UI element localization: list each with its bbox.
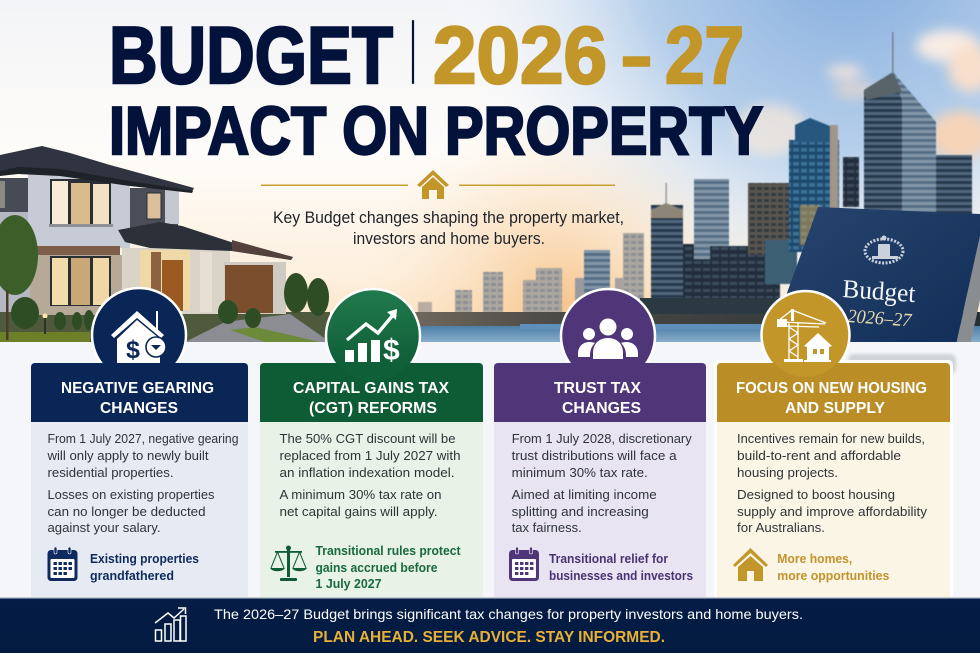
callout: 1 July 2027	[316, 577, 382, 591]
callout	[549, 552, 693, 583]
footer banner	[0, 597, 980, 653]
heading: TRUST TAX	[554, 380, 641, 397]
heading	[61, 380, 214, 417]
house	[0, 146, 330, 345]
heading: CAPITAL GAINS TAX	[293, 380, 449, 397]
body text: net capital gains will apply.	[280, 504, 438, 519]
panel: negative gearing	[31, 288, 248, 597]
body text: can no longer be deducted	[48, 504, 206, 519]
heading: FOCUS ON NEW HOUSING	[736, 380, 927, 397]
callout	[316, 544, 461, 591]
callout: businesses and investors	[549, 569, 693, 583]
body text: splitting and increasing	[512, 504, 649, 519]
body text: trust distributions will face a	[512, 448, 677, 463]
heading: NEGATIVE GEARING	[61, 380, 214, 397]
title: 27	[665, 11, 744, 101]
callout: grandfathered	[90, 569, 174, 583]
icon: scales	[270, 546, 307, 581]
body text: minimum 30% tax rate.	[512, 465, 648, 480]
body text	[512, 431, 692, 535]
title: BUDGET	[109, 11, 393, 101]
panel: new housing and supply	[714, 291, 956, 600]
body text: replaced from 1 July 2027 with	[280, 448, 460, 463]
heading: CHANGES	[562, 400, 641, 417]
footer message: The 2026–27 Budget brings significant tax changes for property investors and home buyers.	[214, 606, 803, 622]
divider with house icon	[261, 170, 615, 199]
icon: house	[733, 548, 768, 581]
body text: Designed to boost housing	[737, 487, 895, 502]
icon: calendar	[48, 547, 78, 581]
subtitle: investors and home buyers.	[353, 230, 545, 248]
callout: Existing properties	[90, 552, 199, 566]
body text: Losses on existing properties	[48, 487, 215, 502]
callout: More homes,	[777, 552, 852, 566]
body text: From 1 July 2028, discretionary	[512, 431, 692, 446]
callout	[777, 552, 889, 583]
title	[109, 11, 763, 169]
callout	[90, 552, 199, 583]
book title: Budget	[842, 274, 917, 308]
icon: growth chart with dollar: $	[383, 334, 400, 367]
subtitle: Key Budget changes shaping the property market,	[273, 209, 624, 227]
icon: crane and house	[717, 291, 950, 422]
heading	[554, 380, 641, 417]
body text: housing projects.	[737, 465, 838, 480]
icon: growth chart with dollar	[260, 289, 483, 422]
body text: supply and improve affordability	[737, 504, 928, 519]
heading	[736, 380, 927, 417]
body text: A minimum 30% tax rate on	[280, 487, 442, 502]
panel: trust tax	[494, 289, 706, 597]
shore and water	[415, 298, 980, 343]
icon: growth chart	[155, 608, 186, 641]
skyline	[418, 32, 972, 316]
icon: group of people	[494, 289, 706, 422]
subtitle	[273, 209, 624, 248]
heading: (CGT) REFORMS	[309, 400, 437, 417]
title: –	[622, 11, 651, 101]
body text: Aimed at limiting income	[512, 487, 657, 502]
icon: house with dollar: $	[126, 336, 140, 364]
body text: build-to-rent and affordable	[737, 448, 901, 463]
body text: will only apply to newly built	[46, 448, 209, 463]
title: 2026	[433, 11, 607, 101]
body text: From 1 July 2027, negative gearing	[48, 431, 238, 446]
callout: more opportunities	[777, 569, 889, 583]
callout: gains accrued before	[316, 561, 438, 575]
body text	[280, 431, 460, 519]
book year: 2026–27	[847, 306, 913, 332]
callout: Transitional relief for	[549, 552, 668, 566]
body text: Incentives remain for new builds,	[737, 431, 925, 446]
footer call to action: PLAN AHEAD. SEEK ADVICE. STAY INFORMED.	[313, 629, 665, 646]
budget book	[760, 207, 980, 400]
callout: Transitional rules protect	[316, 544, 461, 558]
body text: tax fairness.	[512, 520, 582, 535]
body text: residential properties.	[48, 465, 174, 480]
body text: an inflation indexation model.	[280, 465, 454, 480]
heading: AND SUPPLY	[785, 400, 885, 417]
body text: The 50% CGT discount will be	[280, 431, 456, 446]
heading: CHANGES	[100, 400, 178, 417]
icon: house with dollar	[31, 288, 248, 422]
icon: calendar	[509, 547, 539, 581]
body text	[46, 431, 239, 535]
coat of arms emblem	[865, 236, 903, 263]
body text: against your salary.	[48, 520, 160, 535]
title: IMPACT ON PROPERTY	[109, 93, 763, 169]
body text: for Australians.	[737, 520, 825, 535]
heading	[293, 380, 449, 417]
body text	[737, 431, 928, 535]
panel: capital gains tax	[260, 289, 483, 597]
